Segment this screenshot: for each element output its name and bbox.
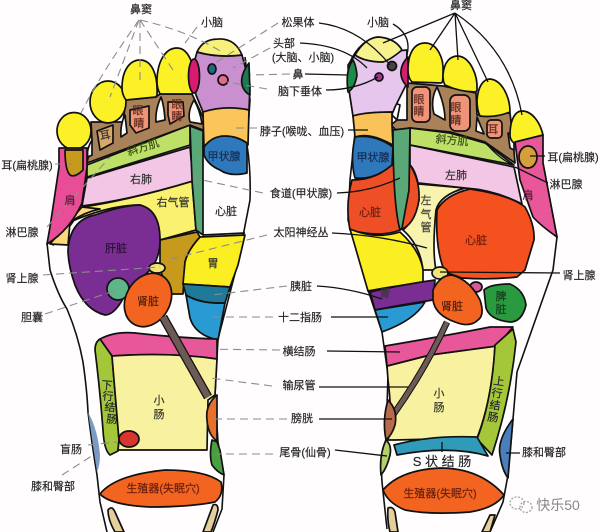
bladder bbox=[207, 395, 217, 441]
pineal bbox=[208, 64, 216, 74]
labels inside right foot: 小 bbox=[434, 387, 444, 400]
heel arcs bbox=[388, 508, 495, 532]
ear gold patch bbox=[65, 150, 83, 176]
labels inside left foot: 甲状腺 bbox=[208, 149, 240, 163]
labels inside left foot: 结 bbox=[104, 401, 116, 414]
labels inside left foot: 右气管 bbox=[156, 195, 190, 209]
outer labels centre column: 脑下垂体 bbox=[278, 84, 322, 98]
outer labels centre column: 太阳神经丛 bbox=[274, 225, 328, 239]
labels inside right foot: 肠 bbox=[487, 410, 499, 425]
small intestine bbox=[387, 346, 495, 440]
shoulder bbox=[515, 135, 557, 237]
pineal bbox=[388, 62, 396, 70]
outer labels right side bbox=[367, 0, 599, 459]
big toe purple bbox=[193, 52, 250, 112]
magenta oval bbox=[401, 57, 408, 87]
outer labels centre column bbox=[130, 2, 344, 459]
left lung bbox=[410, 145, 522, 204]
labels inside left foot: 小 bbox=[154, 394, 164, 407]
labels inside left foot: 睛 bbox=[134, 117, 144, 130]
heart small bbox=[348, 165, 419, 234]
neck bbox=[353, 112, 393, 145]
stomach bbox=[350, 229, 423, 291]
labels inside left foot: 右肺 bbox=[130, 172, 152, 186]
labels inside left foot: 下 bbox=[101, 380, 113, 392]
spleen bbox=[484, 284, 526, 322]
outer labels left side: 肾上腺 bbox=[6, 271, 38, 285]
green oval bbox=[347, 60, 357, 92]
pancreas bbox=[370, 280, 435, 310]
big toe green bbox=[242, 63, 250, 95]
outer labels centre column: 小脑 bbox=[201, 16, 223, 29]
labels inside right foot: 肩 bbox=[522, 188, 534, 202]
labels inside right foot: 管 bbox=[420, 220, 432, 234]
outer labels centre column: 头部 bbox=[273, 36, 295, 50]
transverse colon bbox=[385, 327, 513, 366]
right toes bbox=[408, 43, 443, 83]
labels inside right foot: 甲状腺 bbox=[356, 150, 390, 164]
trapezius band and lungs underlay bbox=[53, 181, 196, 245]
left windpipe bbox=[403, 184, 465, 270]
pale cap bbox=[355, 37, 402, 62]
eye and ear reflex patches bbox=[130, 102, 184, 133]
esophagus strip bbox=[393, 128, 410, 230]
transverse colon bbox=[100, 333, 217, 359]
left foot diagram bbox=[47, 39, 250, 532]
labels inside right foot bbox=[356, 93, 534, 500]
ear patch bbox=[487, 120, 502, 138]
labels inside right foot: 气 bbox=[420, 207, 432, 221]
esophagus strip bbox=[190, 126, 203, 235]
coccyx bbox=[210, 440, 224, 475]
labels inside right foot: 肠 bbox=[434, 401, 444, 414]
adrenal bbox=[149, 263, 165, 273]
outer labels right side: 肾上腺 bbox=[562, 268, 596, 282]
labels inside right foot: 心脏 bbox=[359, 206, 381, 219]
eye patches bbox=[412, 87, 430, 122]
descending colon bbox=[95, 339, 119, 455]
outer labels centre column: 十二指肠 bbox=[278, 310, 322, 324]
pancreas bbox=[183, 284, 230, 303]
shoulder bbox=[47, 148, 87, 244]
appendix red bbox=[119, 431, 139, 447]
labels inside left foot: 耳 bbox=[99, 129, 112, 143]
labels inside left foot: 睛 bbox=[172, 110, 182, 123]
heart boundary bbox=[203, 233, 245, 235]
labels inside right foot: 上 bbox=[493, 374, 505, 389]
outer labels right side: 淋巴腺 bbox=[550, 177, 582, 191]
labels inside left foot: 肩 bbox=[64, 193, 76, 207]
outer labels centre column: 胰脏 bbox=[290, 279, 312, 293]
right lung bbox=[82, 147, 193, 206]
big toe magenta bbox=[188, 59, 200, 93]
heel arcs bbox=[108, 505, 218, 532]
adrenal bbox=[432, 267, 448, 279]
outer labels centre column: 膀胱 bbox=[291, 411, 313, 425]
watermark bbox=[510, 497, 580, 513]
labels inside right foot: 眼 bbox=[414, 93, 424, 106]
outer labels centre column: 鼻 bbox=[292, 67, 304, 81]
labels inside left foot: 斜方肌 bbox=[125, 135, 161, 159]
big toe cap bbox=[197, 39, 242, 56]
labels inside left foot: 眼 bbox=[132, 104, 144, 117]
big heart bbox=[437, 189, 534, 279]
labels inside right foot: 睛 bbox=[450, 114, 462, 127]
labels inside right foot: 心脏 bbox=[465, 234, 487, 247]
labels inside right foot: 斜方肌 bbox=[435, 132, 469, 148]
labels inside right foot: 行 bbox=[491, 386, 503, 401]
white holes bbox=[392, 87, 514, 150]
pale orange wedge bbox=[50, 207, 100, 245]
outer labels left side: 淋巴腺 bbox=[6, 225, 38, 239]
outer labels centre column: 输尿管 bbox=[282, 378, 316, 392]
pituitary bbox=[375, 73, 383, 81]
watermark: 快乐50 bbox=[536, 497, 580, 513]
gallbladder bbox=[107, 278, 129, 300]
labels inside right foot: 脾 bbox=[496, 289, 506, 303]
labels inside right foot: 左 bbox=[420, 194, 432, 207]
outer labels left side: 胆囊 bbox=[21, 310, 43, 324]
outer labels right side: 膝和臀部 bbox=[522, 445, 566, 459]
outer labels right side: 鼻窦 bbox=[450, 0, 472, 12]
outer labels centre column: 尾骨(仙骨) bbox=[279, 446, 331, 459]
trapezius bbox=[87, 125, 190, 177]
s colon bbox=[394, 437, 488, 456]
ureter bbox=[393, 322, 447, 415]
labels inside left foot: 行 bbox=[102, 390, 114, 403]
duodenum bbox=[375, 302, 425, 332]
labels inside left foot: 眼 bbox=[172, 98, 182, 111]
coccyx bbox=[381, 440, 390, 475]
bladder bbox=[384, 400, 396, 440]
gold oval bbox=[519, 146, 537, 168]
outer labels right side: 小脑 bbox=[367, 16, 389, 29]
labels inside right foot: S 状 结 肠 bbox=[413, 454, 471, 469]
thyroid bbox=[204, 136, 247, 174]
white holes between toes bbox=[88, 97, 202, 157]
labels inside right foot: 结 bbox=[489, 398, 501, 413]
labels inside left foot: 心脏 bbox=[215, 205, 237, 218]
labels inside right foot: 脏 bbox=[496, 303, 506, 316]
icon: wechat bubbles bbox=[510, 497, 532, 512]
labels inside left foot: 生殖器(失眠穴) bbox=[126, 481, 200, 495]
lavender toe bbox=[348, 50, 407, 116]
outer labels centre column: 脖子(喉咙、血压) bbox=[260, 124, 344, 138]
trapezius bbox=[410, 128, 514, 165]
thyroid bbox=[352, 136, 393, 178]
outer labels left side bbox=[1, 158, 82, 493]
outer labels centre column: 鼻窦 bbox=[130, 2, 152, 16]
labels inside right foot: 胃 bbox=[380, 287, 390, 300]
outer labels left side: 膝和臀部 bbox=[31, 479, 75, 493]
labels inside right foot: 睛 bbox=[414, 105, 424, 118]
left foot toes bbox=[57, 112, 91, 150]
labels inside right foot: 肾脏 bbox=[441, 300, 463, 313]
labels inside left foot bbox=[64, 98, 240, 495]
left foot outline bbox=[47, 57, 250, 532]
solid leader lines right foot bbox=[300, 13, 560, 456]
labels inside left foot: 肝脏 bbox=[105, 242, 127, 255]
stomach bbox=[183, 235, 245, 287]
right foot diagram bbox=[347, 37, 557, 532]
labels inside left foot: 肠 bbox=[154, 408, 164, 421]
labels inside left foot: 肠 bbox=[106, 413, 118, 426]
knee blue bbox=[500, 419, 513, 478]
outer labels centre column: 松果体 bbox=[282, 15, 314, 29]
labels inside right foot: 眼 bbox=[450, 101, 462, 114]
outer labels left side: 盲肠 bbox=[60, 442, 82, 456]
liver bbox=[68, 205, 160, 315]
pink small bbox=[470, 282, 482, 292]
brown webbing bbox=[87, 94, 207, 163]
outer labels centre column: (大脑、小脑) bbox=[272, 50, 334, 64]
kidney bbox=[115, 265, 181, 335]
ascending colon bbox=[477, 329, 516, 455]
gold area bbox=[160, 232, 200, 294]
right foot outline bbox=[348, 37, 557, 532]
labels inside right foot: 生殖器(失眠穴) bbox=[403, 486, 477, 500]
duodenum bbox=[186, 295, 225, 340]
brown webbing bbox=[391, 83, 515, 163]
genital bbox=[383, 468, 504, 513]
outer labels centre column: 食道(甲状腺) bbox=[270, 186, 332, 200]
outer labels left side: 耳(扁桃腺) bbox=[1, 158, 53, 172]
labels inside right foot: 左肺 bbox=[445, 169, 467, 182]
blue knee patch bbox=[88, 412, 100, 472]
kidney bbox=[433, 275, 482, 325]
labels inside left foot: 胃 bbox=[208, 257, 218, 270]
dashed leader lines left foot bbox=[43, 20, 290, 475]
labels inside left foot: 肾脏 bbox=[137, 295, 159, 308]
outer labels right side: 耳(扁桃腺) bbox=[547, 150, 599, 164]
genital bbox=[100, 470, 222, 507]
labels inside right foot: 耳 bbox=[488, 124, 498, 136]
ureter bbox=[163, 317, 208, 397]
small intestine bbox=[112, 355, 217, 450]
neck bbox=[203, 108, 249, 147]
pituitary bbox=[218, 75, 228, 85]
outer labels centre column: 横结肠 bbox=[282, 344, 316, 358]
